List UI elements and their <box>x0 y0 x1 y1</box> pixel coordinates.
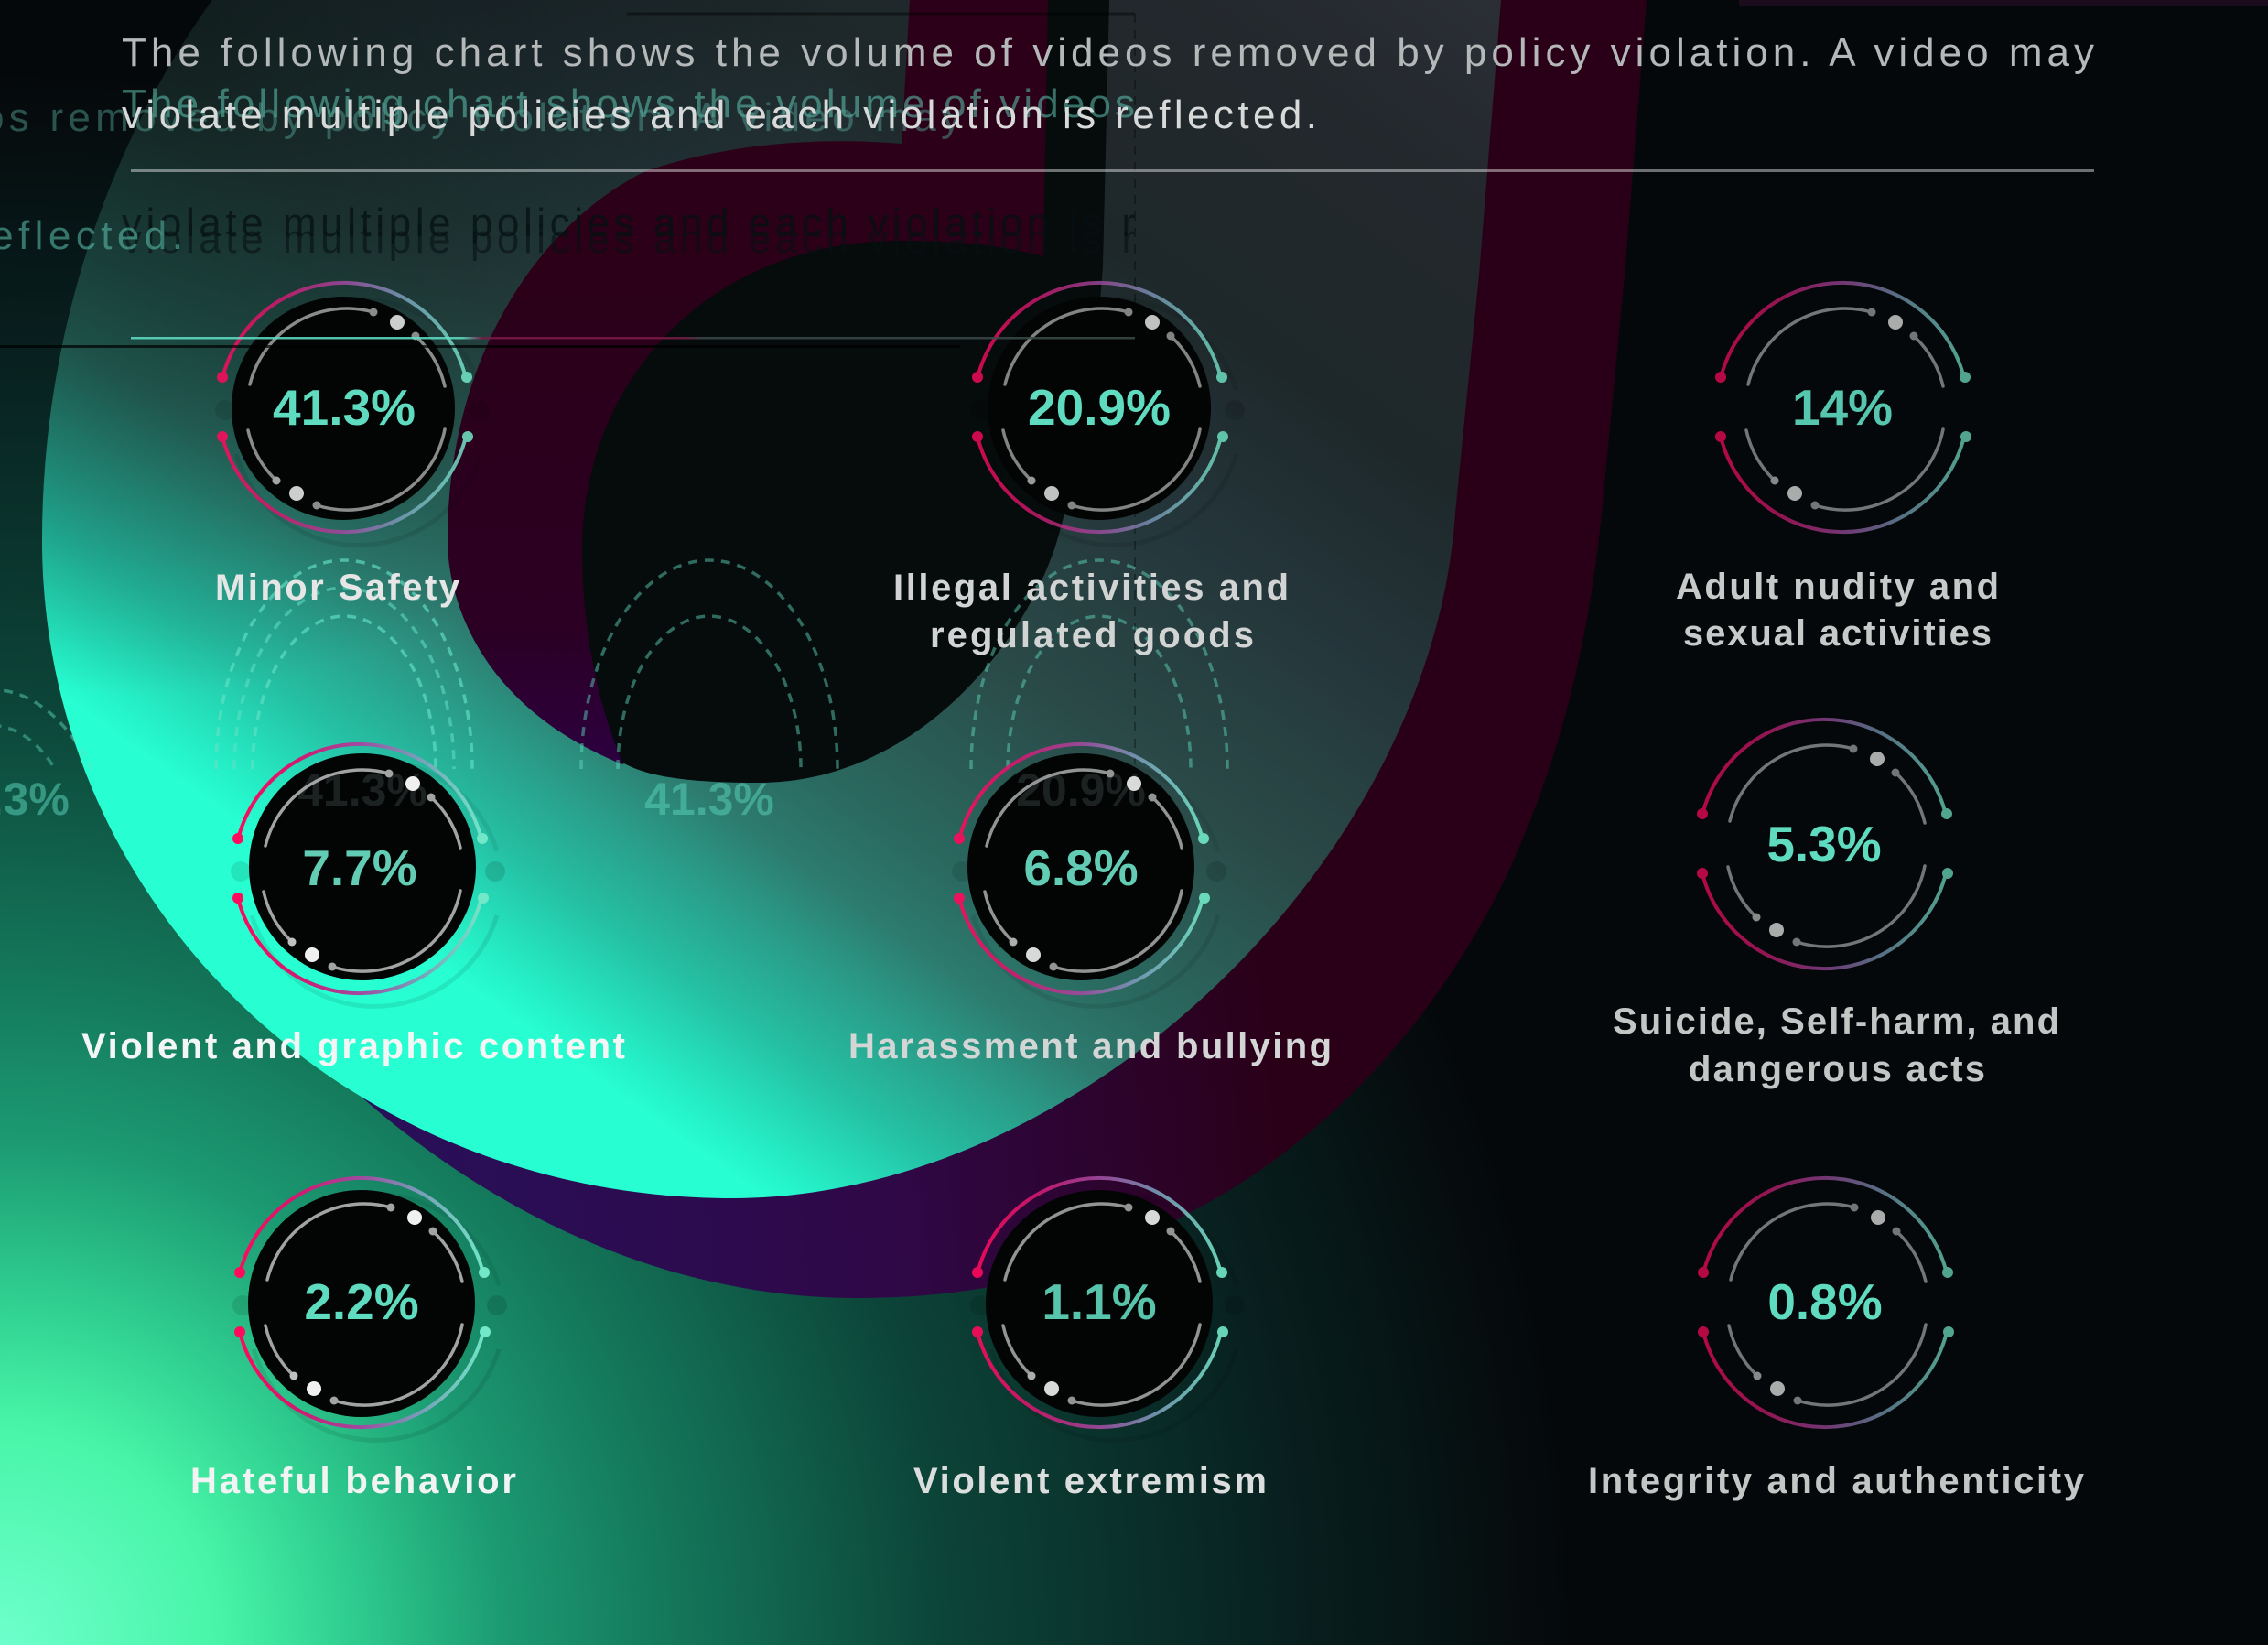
glitch ghost divider rules <box>0 337 1135 348</box>
label: dangerous acts <box>1689 1049 1985 1089</box>
stat: Integrity and authenticity <box>1588 1178 2085 1501</box>
label: Harassment and bullying <box>848 1026 1332 1066</box>
intro text ghost layers: The following chart shows the volume of videos <box>122 81 1135 126</box>
label <box>893 568 1289 655</box>
glitch ghost percent text: 41.3% <box>644 774 774 825</box>
label: Suicide, Self-harm, and <box>1613 1001 2059 1042</box>
ring: 7.7%: 41.3% <box>297 764 427 816</box>
ring: 6.8%: 6.8% <box>1023 839 1139 896</box>
logo: inner crimson ring <box>448 0 1048 764</box>
ring: 20.9%: 20.9% <box>1028 379 1171 436</box>
top edge glow strip <box>1739 0 2268 6</box>
stat: Violent and graphic content <box>81 744 625 1066</box>
ring: 14% <box>1715 283 1971 532</box>
intro text ghost layers: os removed by policy violation. A video may <box>0 95 961 140</box>
label: Adult nudity and <box>1676 567 1999 607</box>
ring: 41.3%: 41.3% <box>273 379 416 436</box>
ring: 2.2% <box>232 1178 507 1440</box>
glitch ghost percent text <box>0 774 774 825</box>
ring: 5.3% <box>1697 720 1953 969</box>
ring: 7.7% <box>231 744 505 1006</box>
label: Violent extremism <box>913 1461 1267 1501</box>
ring: 20.9% <box>970 283 1245 545</box>
logo: back crimson band <box>333 0 1647 1298</box>
ring: 0.8%: 0.8% <box>1767 1273 1883 1330</box>
label: Integrity and authenticity <box>1588 1461 2085 1501</box>
label: sexual activities <box>1683 613 1992 654</box>
ring: 41.3% <box>215 283 490 545</box>
intro text <box>122 30 2094 137</box>
ring: 6.8%: 20.9% <box>1016 764 1146 816</box>
stat: Harassment and bullying <box>848 744 1332 1066</box>
ring: 5.3%: 5.3% <box>1766 816 1882 872</box>
intro text: The following chart shows the volume of videos removed by policy violation. A video may <box>122 30 2094 75</box>
glitch guide lines <box>627 14 1135 915</box>
intro text ghost layers: violate multiple policies and each violation is r <box>122 217 1135 262</box>
label: Minor Safety <box>215 568 460 608</box>
stat: Adult nudity <box>1676 283 1999 654</box>
stat: Minor Safety <box>215 283 490 608</box>
label <box>1613 1001 2059 1089</box>
ring: 1.1% <box>970 1178 1245 1440</box>
ring: 6.8% <box>952 744 1226 1006</box>
glitch ghost arches <box>0 560 1227 769</box>
label: Hateful behavior <box>190 1461 516 1501</box>
ring: 1.1%: 1.1% <box>1042 1273 1157 1330</box>
intro text ghost layers <box>0 81 1135 262</box>
label: Violent and graphic content <box>81 1026 625 1066</box>
label: Illegal activities and <box>893 568 1289 608</box>
stat: Illegal activities <box>893 283 1289 655</box>
label: regulated goods <box>930 615 1254 655</box>
stat: Violent extremism <box>913 1178 1267 1501</box>
intro divider rule <box>131 169 2094 172</box>
logo: teal ring <box>42 0 1501 1198</box>
intro text ghost layers: violate multiple policies and each violation is r <box>122 200 1135 245</box>
ring: 7.7%: 7.7% <box>302 839 417 896</box>
ring: 2.2%: 2.2% <box>304 1273 419 1330</box>
stat: Hateful behavior <box>190 1178 516 1501</box>
logo: dark hole and stem gap <box>582 0 1109 783</box>
label <box>1676 567 1999 654</box>
ring: 0.8% <box>1698 1178 1954 1427</box>
intro text: violate multiple policies and each violation is reflected. <box>122 92 1317 137</box>
stat: Suicide and self-harm <box>1613 720 2059 1089</box>
ring: 14%: 14% <box>1792 379 1893 436</box>
